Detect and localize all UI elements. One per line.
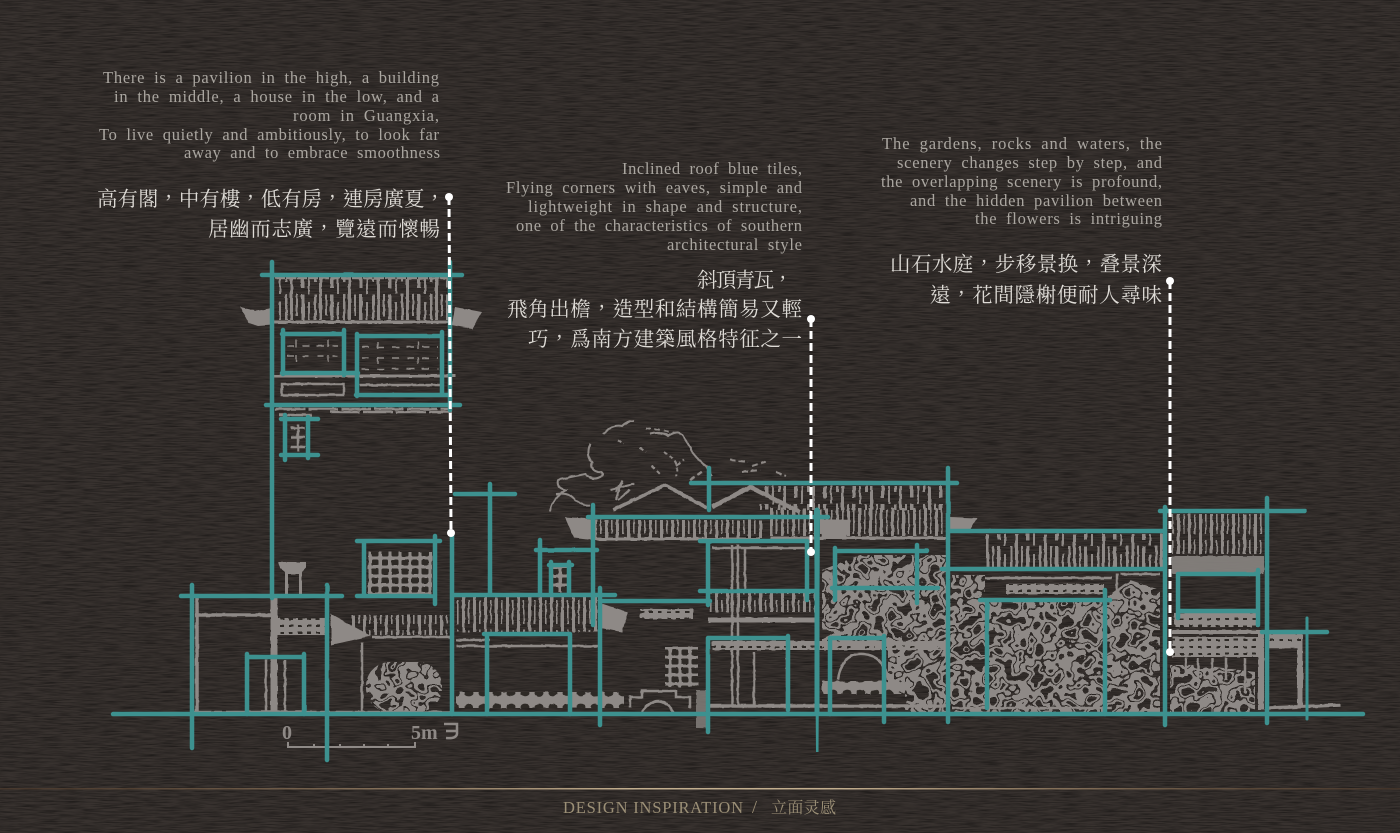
scale bar: 0 bbox=[282, 722, 292, 744]
text block: pavilion: 高有閣，中有樓，低有房，連房廣夏， bbox=[97, 188, 445, 211]
text block: garden: 山石水庭，步移景换，叠景深 bbox=[890, 253, 1162, 276]
text block: garden: The gardens, rocks and waters, the bbox=[882, 134, 1162, 153]
text block: roof: lightweight in shape and structure, bbox=[528, 197, 802, 216]
text block: garden: and the hidden pavilion between bbox=[910, 191, 1162, 210]
teal: tower windows bbox=[281, 330, 448, 460]
text block: pavilion: 居幽而志廣，覽遠而懷暢 bbox=[208, 218, 440, 241]
footer title: / bbox=[752, 797, 757, 817]
foliage: right garden bbox=[948, 575, 1160, 712]
elevation sketch in grey bbox=[191, 278, 1340, 747]
text block: garden: 遠，花間隱榭便耐人尋味 bbox=[930, 284, 1162, 307]
text block: garden: the overlapping scenery is profound, bbox=[881, 172, 1162, 191]
footer title: DESIGN INSPIRATION bbox=[563, 798, 743, 817]
teal: tower frame bbox=[262, 262, 462, 598]
text block: roof: 飛角出檐，造型和結構簡易又輕 bbox=[507, 298, 802, 321]
text block: roof: Flying corners with eaves, simple and bbox=[506, 178, 803, 197]
footer title bbox=[563, 797, 836, 817]
text block: pavilion: To live quietly and ambitiously, to look far bbox=[99, 125, 440, 144]
central building sketch bbox=[456, 485, 977, 728]
callout leader: garden bbox=[1166, 277, 1174, 656]
foliage: bush under right pavilion bbox=[1170, 665, 1255, 712]
tower lower storey and lower-left house bbox=[191, 552, 600, 712]
text block: garden bbox=[881, 134, 1163, 307]
callout leader: tower bbox=[445, 193, 455, 537]
footer rule bbox=[0, 788, 1400, 790]
teal: right garden frame bbox=[942, 498, 1327, 725]
text block: garden: the flowers is intriguing bbox=[975, 209, 1162, 228]
text block: pavilion: in the middle, a house in the low, and a bbox=[114, 87, 440, 106]
foliage: small bush bbox=[366, 662, 442, 712]
teal: second bay bbox=[452, 484, 828, 725]
text block: garden: scenery changes step by step, and bbox=[897, 153, 1163, 172]
foliage: central garden tree bbox=[822, 555, 948, 712]
scale bar: 5m bbox=[411, 722, 438, 744]
text block: roof: 巧，爲南方建築風格特征之一 bbox=[528, 328, 802, 351]
teal: window bbox=[357, 536, 440, 604]
scale bar bbox=[282, 722, 457, 747]
text block: pavilion: room in Guangxia, bbox=[293, 106, 439, 125]
teal: lower-left house bbox=[181, 585, 342, 760]
right building roofs and garden bbox=[952, 514, 1340, 710]
teal structure overlay bbox=[113, 262, 1363, 760]
text block: roof: 斜頂青瓦， bbox=[697, 269, 793, 292]
tower upper storey bbox=[240, 278, 482, 452]
text block: roof bbox=[506, 159, 803, 351]
callout leader: roof bbox=[807, 315, 815, 556]
text block: pavilion: There is a pavilion in the high, a building bbox=[103, 68, 439, 87]
teal: ground line bbox=[113, 712, 1363, 716]
teal: central frame bbox=[691, 468, 957, 732]
text block: roof: architectural style bbox=[667, 235, 802, 254]
text block: roof: Inclined roof blue tiles, bbox=[622, 159, 802, 178]
text block: pavilion: away and to embrace smoothness bbox=[184, 143, 440, 162]
tree outline behind central roof bbox=[550, 421, 786, 512]
text block: pavilion bbox=[97, 68, 445, 241]
footer title: 立面灵感 bbox=[771, 799, 836, 817]
text block: roof: one of the characteristics of southern bbox=[516, 216, 802, 235]
